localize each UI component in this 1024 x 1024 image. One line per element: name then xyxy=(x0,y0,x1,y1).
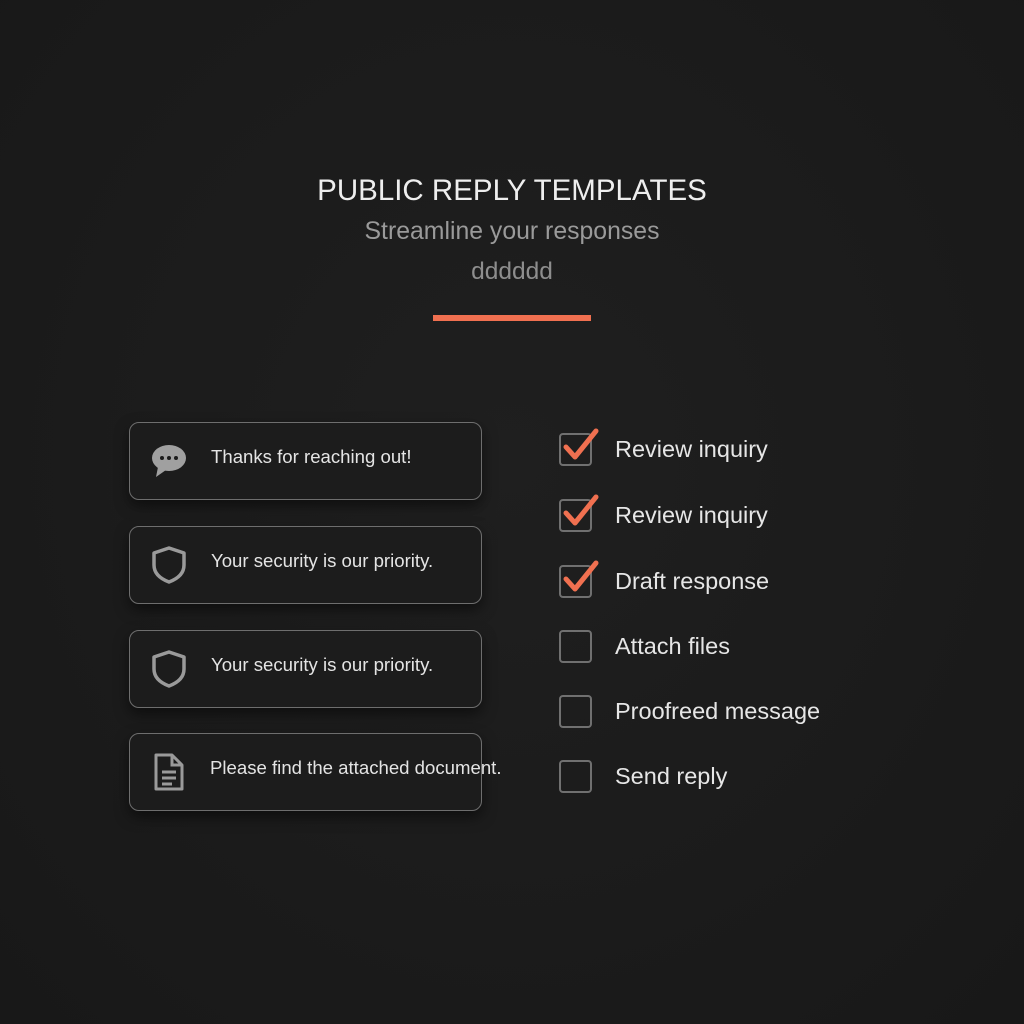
item: review inquiry 2: Review inquiry xyxy=(615,502,768,528)
item: draft response xyxy=(559,560,769,598)
card: document xyxy=(129,733,482,811)
card: security 1: Your security is our priority. xyxy=(211,550,433,571)
title: PUBLIC REPLY TEMPLATES xyxy=(317,174,707,207)
subtitle: Streamline your responses xyxy=(365,218,659,245)
item: send reply: Send reply xyxy=(615,763,727,789)
icon: shield xyxy=(152,546,186,584)
item: proofreed xyxy=(559,695,820,728)
item: review inquiry: Review inquiry xyxy=(615,436,768,462)
item: attach files xyxy=(559,630,730,663)
icon: speech bubble xyxy=(152,445,186,477)
card: thanks xyxy=(129,422,482,500)
card: security 2: Your security is our priority. xyxy=(211,654,433,675)
card: security 1 xyxy=(129,526,482,604)
icon: document xyxy=(154,754,184,790)
item: send reply xyxy=(559,760,728,793)
item: proofreed: Proofreed message xyxy=(615,698,820,724)
card: security 2 xyxy=(129,630,482,708)
item: attach files: Attach files xyxy=(615,633,730,659)
card: thanks: Thanks for reaching out! xyxy=(211,446,412,467)
item: draft response: Draft response xyxy=(615,568,769,594)
card: document: Please find the attached document. xyxy=(210,757,502,778)
item: review inquiry 2 xyxy=(559,494,768,532)
orange divider xyxy=(433,315,591,321)
checklist xyxy=(559,428,820,793)
placeholder text: dddddd xyxy=(471,258,553,285)
icon: shield xyxy=(152,650,186,688)
item: review inquiry xyxy=(559,428,768,466)
